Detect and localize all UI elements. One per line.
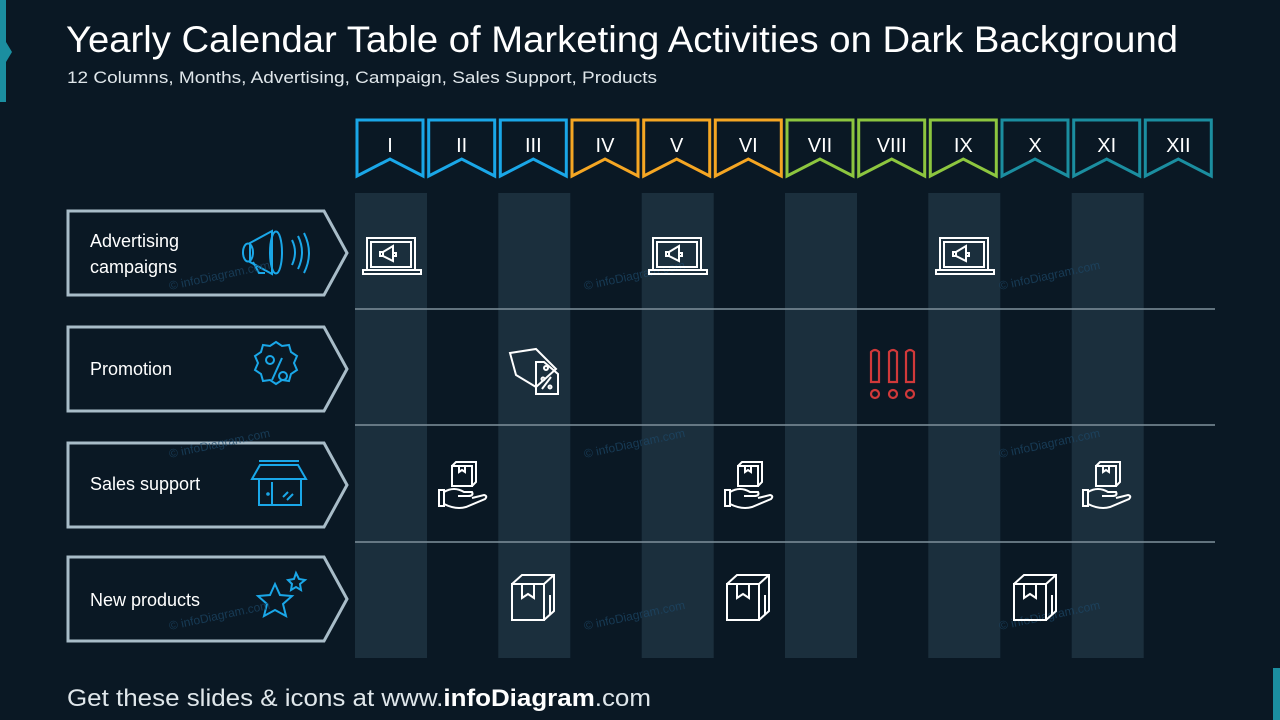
row label: New products: New products [90,590,200,610]
title: Yearly Calendar Table of Marketing Activities on Dark Background [66,19,1178,60]
accent bar bottom right [1273,668,1280,720]
row label: Advertising campaigns: Advertising [90,231,179,251]
footer: Get these slides & icons at www. infoDiagram .com [67,685,651,712]
month ribbons: X [1028,135,1042,157]
watermarks: © infoDiagram.com [583,426,686,461]
month ribbons: IV [596,135,615,157]
row label: Promotion [68,327,347,411]
subtitle: 12 Columns, Months, Advertising, Campaign, Sales Support, Products [67,68,657,87]
watermarks: © infoDiagram.com [998,426,1101,461]
column shading [355,193,1144,658]
watermarks: © infoDiagram.com [168,258,271,293]
icons: laptop megaphone [363,238,994,274]
icons: hand with box [439,462,1130,508]
month ribbons: V [670,135,684,157]
month ribbons: I [387,135,393,157]
month ribbons: VIII [877,135,907,157]
month ribbons: III [525,135,542,157]
icons: product boxes [512,575,1056,620]
row label: Sales support [68,443,347,527]
row label: New products [68,557,347,641]
row label: Promotion: Promotion [90,359,172,379]
month ribbons: VI [739,135,758,157]
icon: price tags [510,349,558,394]
month ribbons [357,120,1211,176]
month ribbons: XI [1097,135,1116,157]
watermarks: © infoDiagram.com [583,258,686,293]
month ribbons: IX [954,135,973,157]
watermarks: © infoDiagram.com [583,598,686,633]
accent bar left [0,0,12,102]
watermarks: © infoDiagram.com [168,426,271,461]
month ribbons: II [456,135,467,157]
row label: Advertising campaigns [68,211,347,295]
watermarks: © infoDiagram.com [998,258,1101,293]
month ribbons: VII [808,135,832,157]
row label: Sales support: Sales support [90,474,200,494]
row label: Advertising campaigns: campaigns [90,257,177,277]
watermarks: © infoDiagram.com [168,598,271,633]
month ribbons: XII [1166,135,1191,157]
icon: exclamations [871,350,914,398]
watermarks: © infoDiagram.com [998,598,1101,633]
watermarks [168,258,1101,633]
